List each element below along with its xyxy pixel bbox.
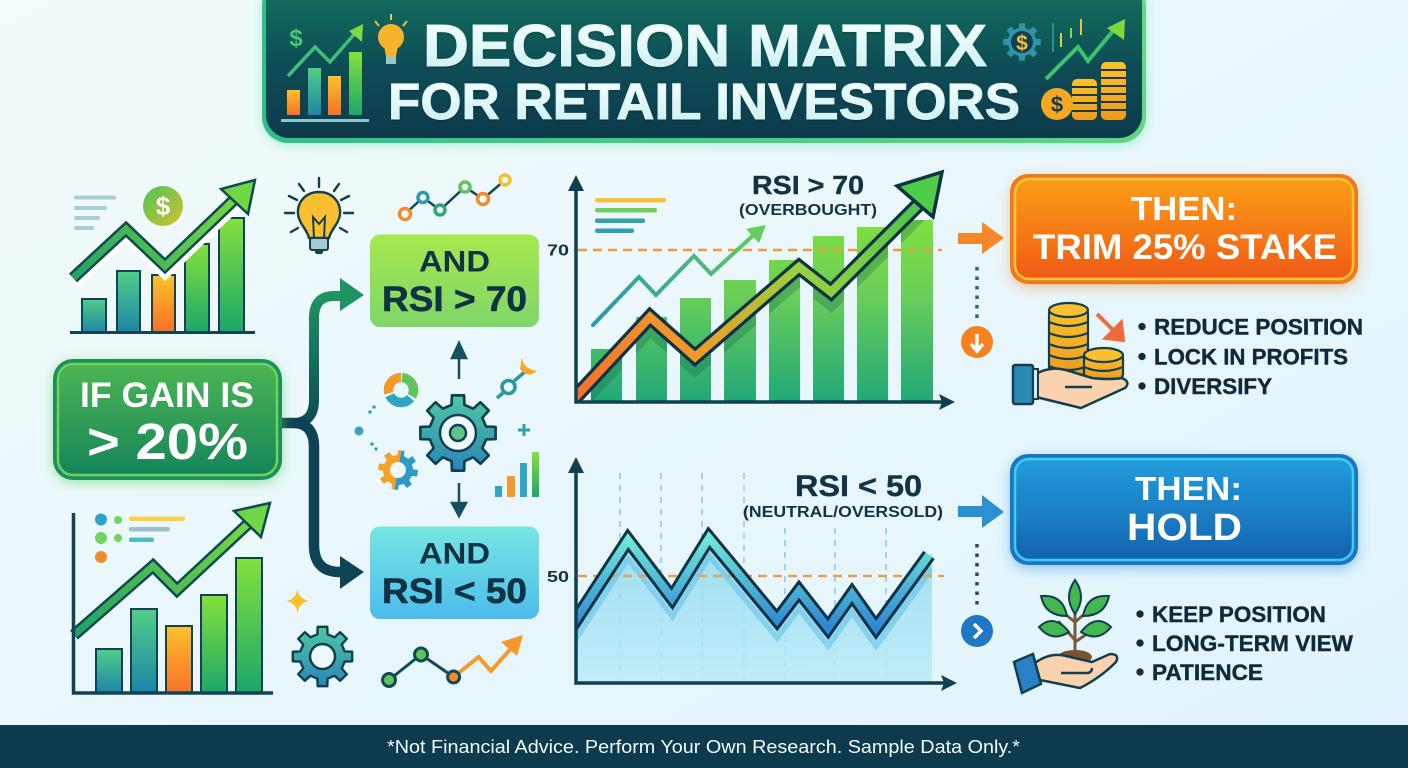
cuff	[1014, 654, 1041, 693]
icon: dollar coin: $	[156, 191, 171, 221]
growth arrow	[73, 180, 255, 282]
if gain box	[53, 359, 282, 480]
branch arrow to RSI below 50	[282, 423, 364, 589]
icon: coins in hand	[1013, 303, 1127, 408]
title icon: coins	[1041, 62, 1126, 120]
area	[576, 535, 932, 683]
and rsi below 50 box	[370, 526, 539, 619]
if gain box: IF GAIN IS	[80, 376, 254, 415]
cuff	[1013, 365, 1033, 404]
chart label: (NEUTRAL/OVERSOLD)	[743, 504, 943, 521]
legend	[95, 514, 185, 563]
arrow to hold	[958, 495, 1004, 528]
donut chart	[383, 372, 419, 408]
title icon: dollar gear: $	[1016, 32, 1028, 55]
footer disclaimer: *Not Financial Advice. Perform Your Own Research. Sample Data Only.*	[387, 737, 1020, 757]
title text: DECISION MATRIX	[423, 13, 987, 79]
bullets trim: DIVERSIFY	[1154, 374, 1272, 399]
then trim box: THEN:	[1131, 190, 1237, 227]
growth arrow	[74, 503, 270, 635]
leaves	[1039, 580, 1111, 636]
legend lines	[595, 198, 666, 233]
title icon: candles and arrow	[1046, 19, 1125, 79]
title icon: bar chart with arrow: $	[289, 25, 303, 52]
icon: top line chain	[400, 175, 510, 220]
thin arrow	[593, 225, 766, 325]
title banner	[262, 0, 1146, 143]
bullets hold: PATIENCE	[1152, 660, 1263, 685]
title icon: bar chart with arrow	[281, 24, 369, 122]
plus	[518, 424, 530, 436]
title text: FOR RETAIL INVESTORS	[388, 73, 1020, 130]
bars	[96, 558, 262, 693]
title text	[388, 13, 1020, 130]
bullets trim: REDUCE POSITION	[1154, 314, 1363, 340]
icon: plant in hand	[1014, 580, 1117, 693]
bars	[591, 220, 933, 401]
then trim box: TRIM 25% STAKE	[1033, 228, 1337, 267]
threshold line 50	[578, 575, 944, 577]
icon: dollar coin	[143, 186, 183, 226]
footer disclaimer	[0, 725, 1408, 768]
title icon: coins: $	[1051, 92, 1063, 117]
label 50: 50	[547, 569, 569, 586]
main arrow	[570, 172, 942, 403]
and rsi above 70 box: AND	[419, 246, 490, 278]
title icon: light bulb	[375, 14, 407, 64]
left top chart	[70, 180, 255, 334]
chart: RSI above 70	[547, 170, 955, 410]
half gear	[375, 447, 421, 493]
central gear cluster	[354, 343, 539, 516]
bullets hold: KEEP POSITION	[1152, 602, 1326, 627]
hand	[1036, 369, 1127, 408]
icon: bottom line chain	[382, 635, 523, 686]
chart label	[739, 170, 877, 219]
then hold box: HOLD	[1127, 507, 1242, 549]
and rsi above 70 box	[370, 234, 539, 327]
left bottom chart	[74, 503, 273, 693]
branch arrow to RSI above 70	[282, 278, 364, 423]
bullets trim	[1138, 314, 1363, 399]
icon: light bulb	[285, 178, 353, 254]
stem	[1056, 600, 1096, 655]
red arrow	[1097, 314, 1123, 340]
icon: sparkle	[286, 589, 309, 613]
chart label: RSI < 50	[795, 470, 922, 503]
soil	[1058, 650, 1092, 664]
dots	[354, 405, 378, 451]
coin stacks	[1049, 303, 1123, 380]
arrow up	[452, 343, 466, 379]
then trim box	[1010, 174, 1358, 284]
label 70: 70	[547, 242, 569, 260]
and rsi below 50 box: AND	[419, 538, 490, 570]
bars	[82, 218, 244, 332]
arrow to trim	[958, 222, 1004, 254]
arrow down	[452, 483, 466, 516]
if gain box: > 20%	[87, 413, 248, 470]
main arrow shadow on bars	[578, 214, 920, 406]
key ring icon	[497, 357, 537, 398]
axes	[74, 513, 273, 693]
hand	[1035, 654, 1117, 688]
dotted connector hold	[961, 544, 993, 647]
threshold line 70	[578, 249, 942, 251]
lines legend	[74, 196, 116, 230]
then hold box: THEN:	[1135, 470, 1242, 507]
axes	[568, 175, 955, 410]
title icon: dollar gear	[1003, 23, 1041, 61]
mini bars	[495, 452, 539, 497]
axes	[568, 457, 957, 691]
icon: gear bottom	[293, 627, 352, 686]
dotted connector trim	[961, 267, 993, 358]
then hold box	[1010, 454, 1358, 565]
bullets trim: LOCK IN PROFITS	[1154, 344, 1348, 370]
center gear	[420, 395, 496, 471]
chart: RSI below 50	[547, 457, 957, 691]
bullets hold	[1136, 602, 1353, 685]
chart label: (OVERBOUGHT)	[739, 202, 877, 219]
and rsi above 70 box: RSI > 70	[382, 280, 527, 319]
chart label	[743, 470, 943, 521]
line shadow	[568, 549, 929, 643]
chart label: RSI > 70	[752, 170, 864, 200]
bullets hold: LONG-TERM VIEW	[1152, 631, 1353, 656]
and rsi below 50 box: RSI < 50	[382, 572, 527, 611]
line	[568, 538, 929, 632]
grid lines	[620, 473, 886, 683]
